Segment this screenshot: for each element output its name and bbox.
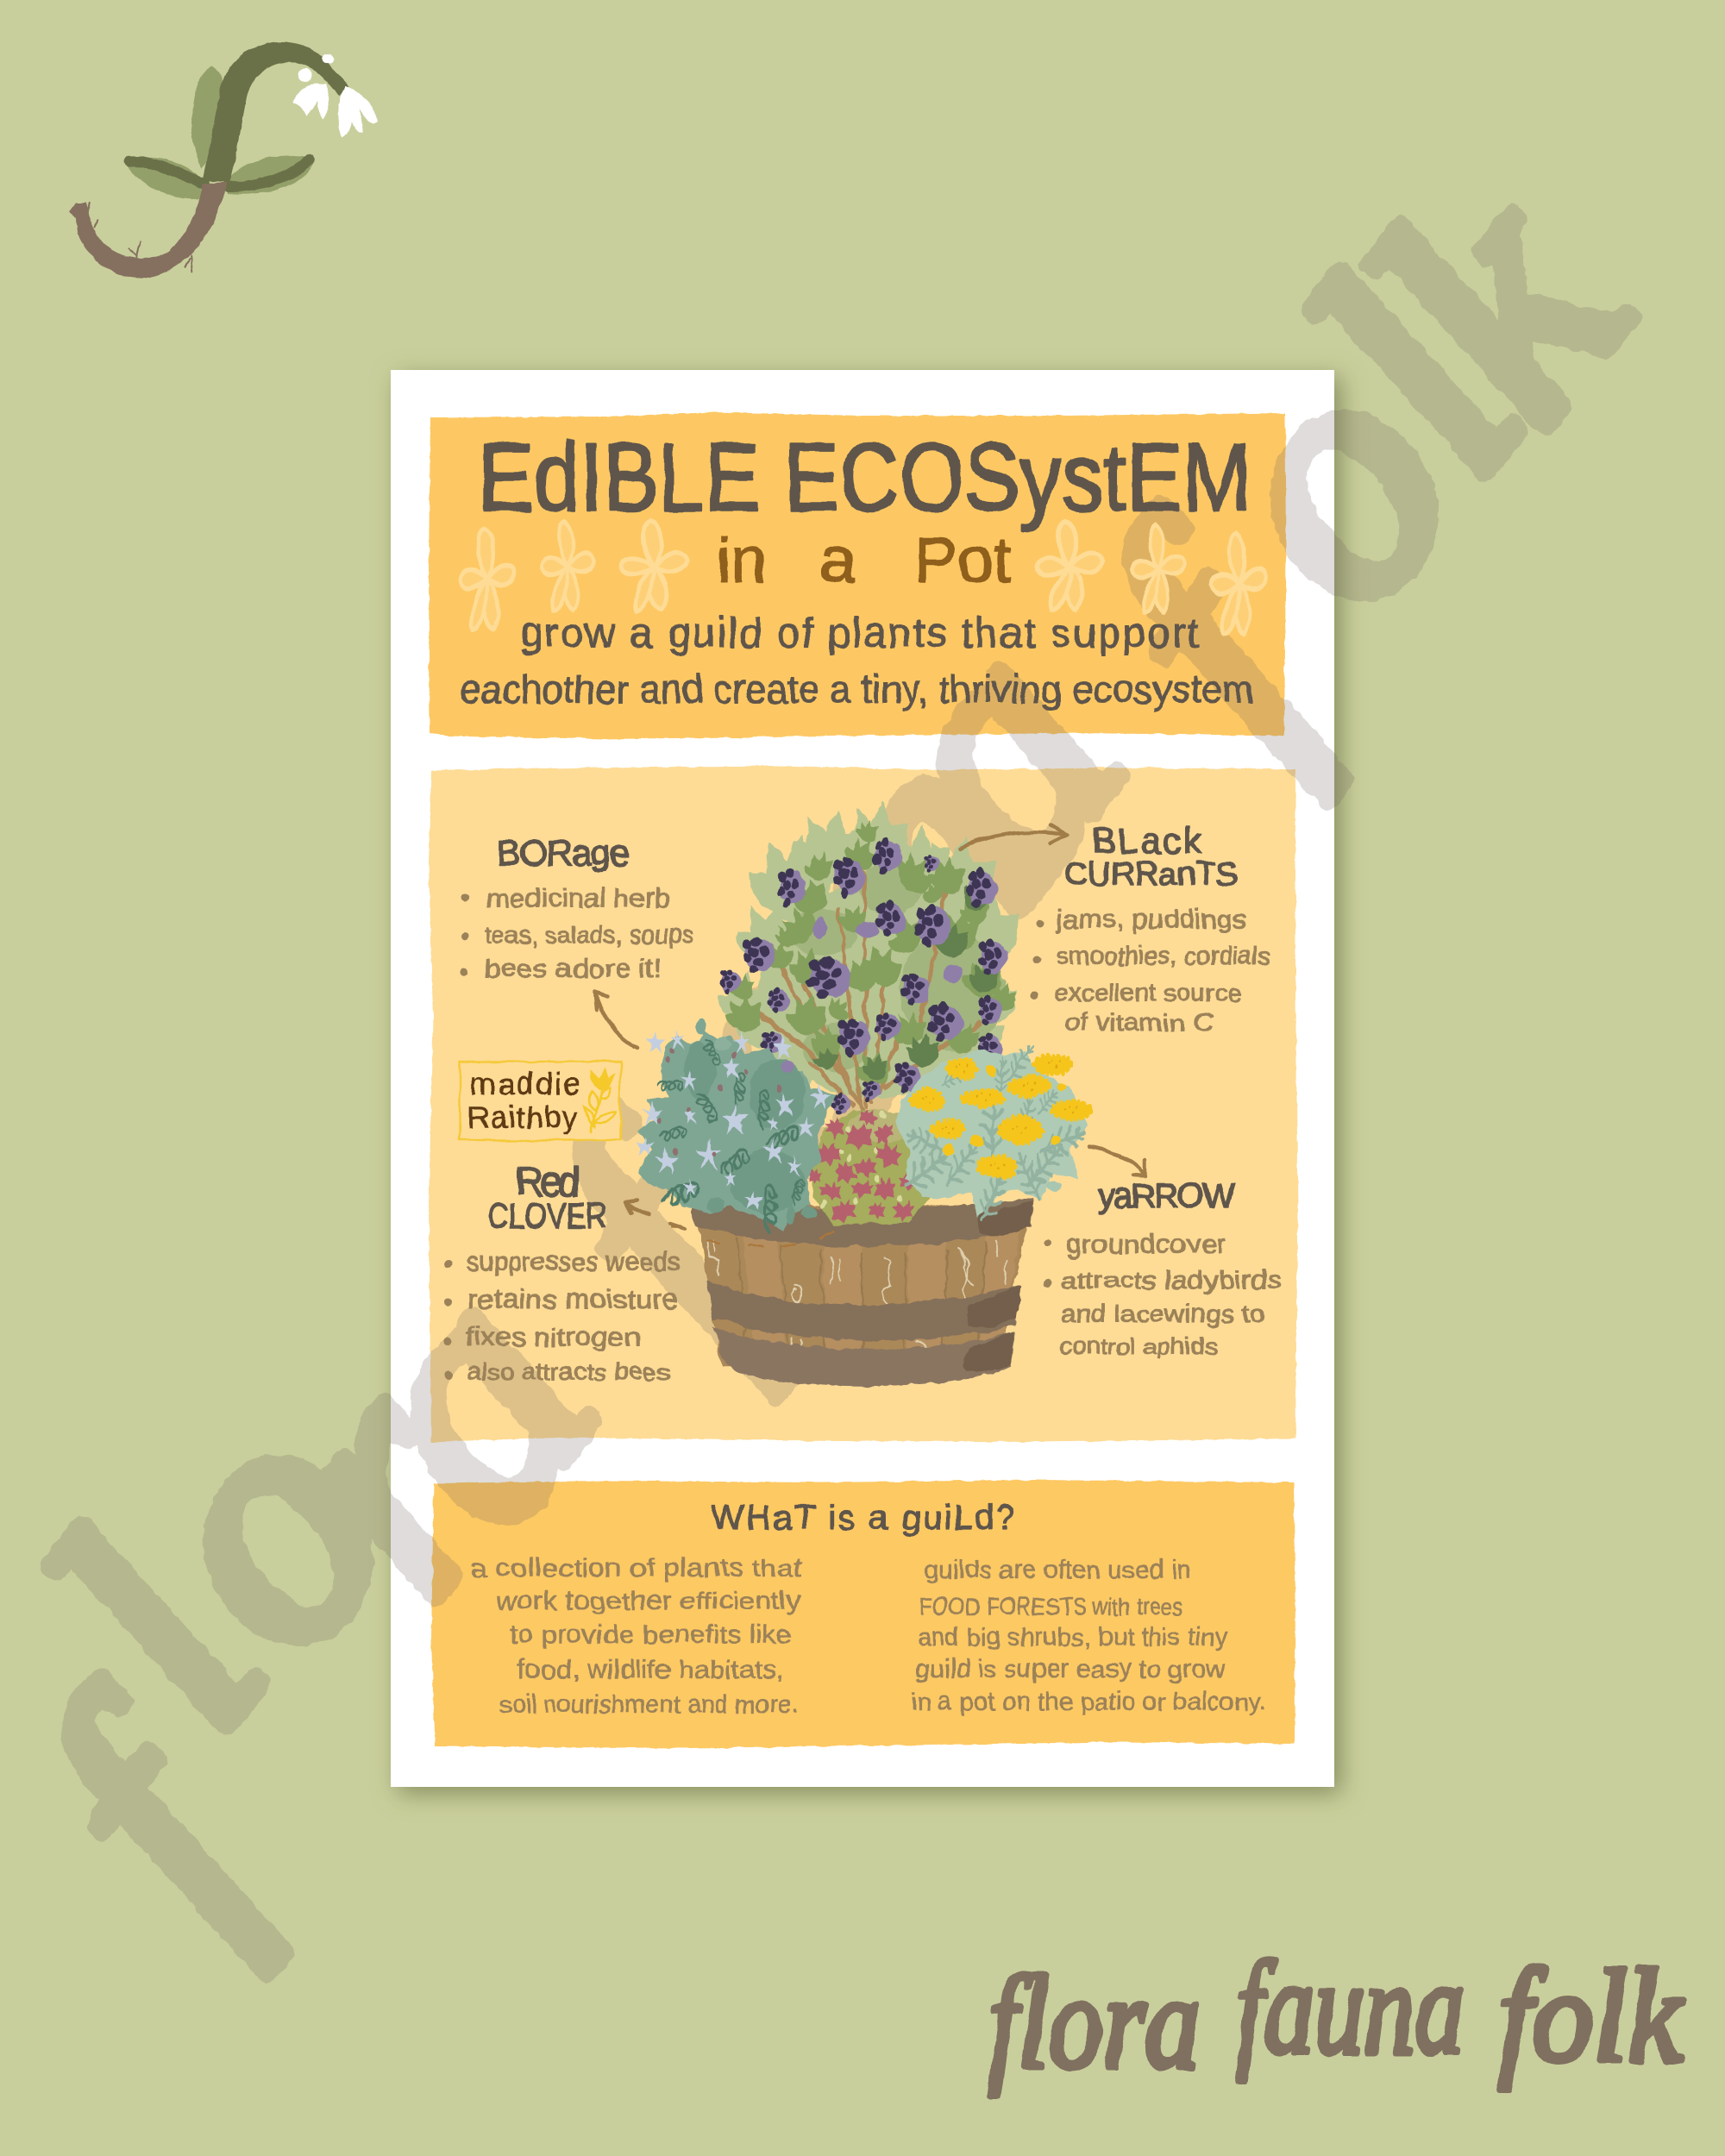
brand wordmark: flora: [988, 1948, 1200, 2096]
black currant bush: [718, 802, 1019, 1114]
borage heading: BORage: [497, 832, 630, 873]
clover heading: CLOVER: [488, 1195, 606, 1236]
currants heading: CURRanTS: [1063, 856, 1238, 893]
clover list: suppresses weeds: [467, 1246, 681, 1276]
currants list: of vitamin C: [1063, 1009, 1214, 1037]
tagline: eachother and create a tiny, thriving ecosystem: [460, 667, 1254, 711]
label: black currants: [1032, 820, 1270, 1037]
yarrow list: attracts ladybirds: [1061, 1267, 1282, 1294]
barrel pot: [672, 1198, 1034, 1387]
borage list: teas, salads, soups: [485, 921, 694, 950]
clover list: retains moisture: [467, 1284, 679, 1314]
text column: definition: [471, 1554, 803, 1719]
text column: definition: food, wildlife habitats,: [518, 1656, 784, 1684]
currants heading: [1063, 820, 1238, 893]
brand wordmark: folk: [1498, 1942, 1684, 2090]
signature badge: maddie: [470, 1066, 580, 1101]
text column: definition: a collection of plants that: [471, 1554, 803, 1583]
text column: definition: soil nourishment and more.: [499, 1690, 799, 1719]
text column: usage: FOOD FORESTS with trees: [919, 1593, 1183, 1620]
text column: definition: work together efficiently: [495, 1587, 800, 1615]
tagline: grow a guild of plants that support: [520, 611, 1199, 656]
clover list: [445, 1246, 681, 1385]
yarrow list: [1044, 1229, 1282, 1359]
subtitle: in a pot: in: [717, 524, 767, 596]
brand wordmark: fauna: [1236, 1934, 1465, 2082]
arrow: black currants: [960, 824, 1068, 849]
arrow: borage: [595, 992, 638, 1047]
poster card: [391, 370, 1334, 1787]
clover heading: [488, 1159, 606, 1236]
tagline: [460, 611, 1254, 711]
decorative flowers row: [460, 521, 1266, 637]
panel: illustration background: [429, 766, 1298, 1442]
text column: usage: and big shrubs, but this tiny: [917, 1623, 1227, 1651]
signature badge: [460, 1062, 620, 1140]
yarrow list: groundcover: [1065, 1229, 1226, 1259]
text column: usage: guild is super easy to grow: [915, 1655, 1225, 1683]
arrow: red clover: [625, 1200, 686, 1229]
label: yarrow: [1044, 1177, 1282, 1359]
borage list: [461, 883, 694, 983]
label: borage: [461, 832, 694, 983]
subtitle: in a pot: a: [820, 524, 856, 596]
text column: definition: to provide benefits like: [510, 1620, 792, 1649]
currants list: smoothies, cordials: [1057, 943, 1270, 970]
logo flowers: [293, 54, 377, 137]
label: red clover: [445, 1159, 681, 1385]
subtitle: in a pot: Pot: [915, 524, 1012, 596]
text column: usage: guilds are often used in: [925, 1556, 1191, 1584]
yarrow heading: yaRROW: [1098, 1177, 1235, 1215]
illustration: plant pot guild: [637, 802, 1090, 1387]
logo leaves: [125, 66, 315, 198]
brand wordmark: [988, 1934, 1684, 2096]
signature badge: Raithby: [467, 1100, 578, 1135]
text column: usage: [911, 1556, 1266, 1716]
currants list: jams, puddings: [1056, 904, 1246, 934]
heading: what is a guild: WHaT is a guiLd?: [712, 1499, 1015, 1537]
red clover plant: [807, 1106, 931, 1225]
text and arrows layer: [445, 423, 1684, 2096]
poster panels: [429, 412, 1298, 1748]
currants list: [1032, 904, 1270, 1037]
borage list: bees adore it!: [485, 955, 662, 983]
clover list: also attracts bees: [467, 1358, 670, 1385]
panel: guild background: [431, 1480, 1295, 1748]
arrow: yarrow: [1088, 1147, 1145, 1175]
borage list: medicinal herb: [486, 883, 670, 913]
panel: title background: [429, 412, 1286, 739]
yarrow list: control aphids: [1059, 1333, 1217, 1359]
icon: f logo with snowdrop: [69, 41, 377, 279]
text column: usage: in a pot on the patio or balcony.: [911, 1688, 1266, 1716]
currants list: excellent source: [1054, 980, 1241, 1007]
clover list: fixes nitrogen: [466, 1323, 641, 1351]
clover heading: Red: [515, 1159, 580, 1204]
logo stem: [69, 41, 349, 279]
yarrow list: and lacewings to: [1061, 1300, 1265, 1328]
borage plant: [637, 1018, 836, 1232]
currants heading: BLack: [1092, 820, 1202, 861]
icon: yellow flower: [585, 1068, 615, 1133]
title: EdIBLE ECOSystEM: [478, 423, 1251, 531]
watermark: flora fauna folk: [0, 119, 1698, 1978]
yarrow plant: [895, 1040, 1090, 1226]
